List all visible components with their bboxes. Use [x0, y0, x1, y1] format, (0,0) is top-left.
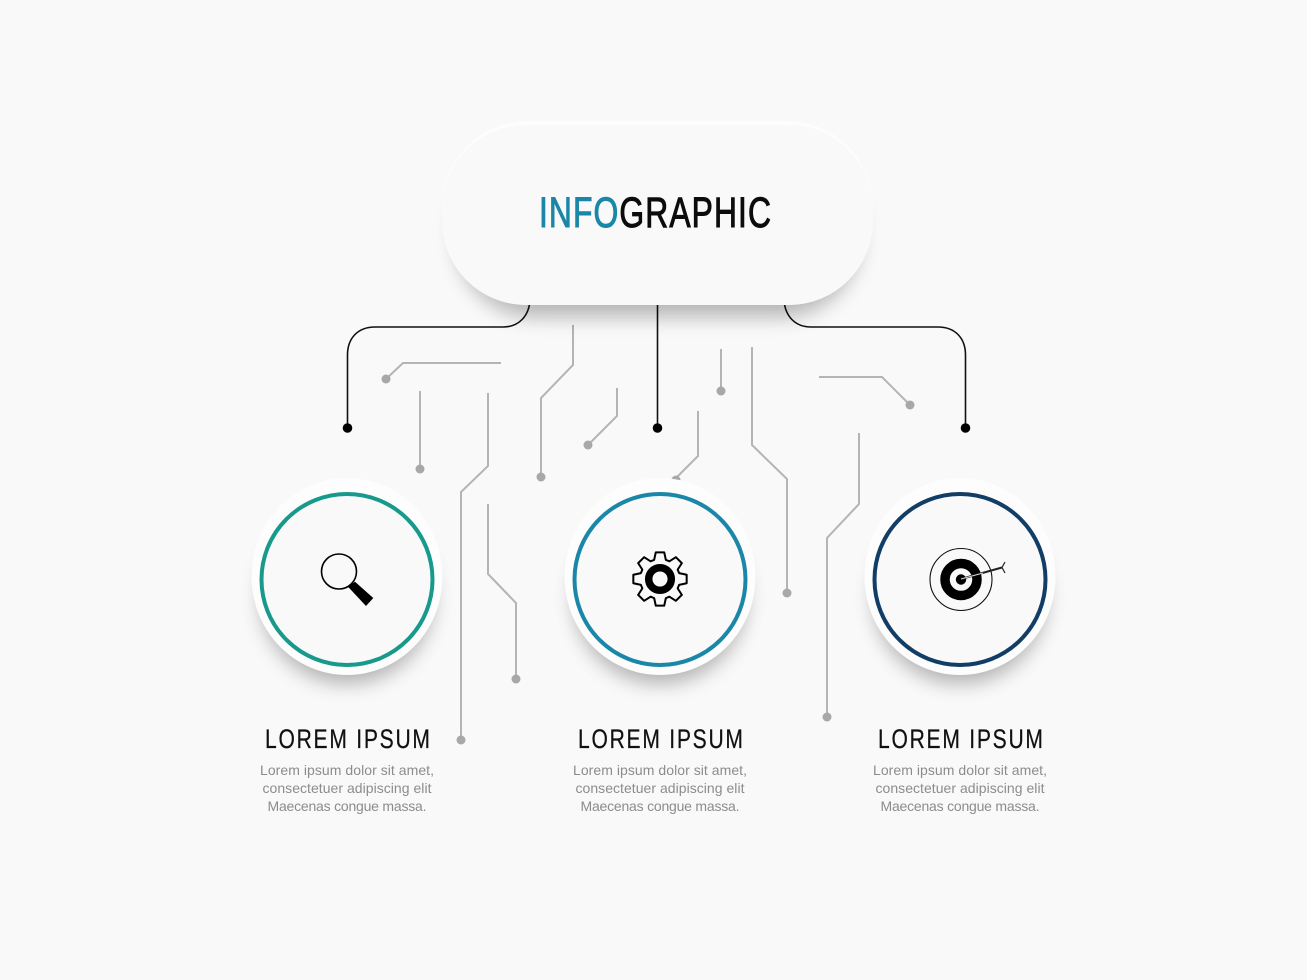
panel: target	[864, 478, 1056, 814]
text: search: Lorem ipsum dolor sit amet,	[260, 762, 434, 778]
text: target: Maecenas congue massa.	[880, 798, 1040, 814]
text: settings: consectetuer adipiscing elit	[576, 780, 745, 796]
panel: settings	[564, 478, 756, 814]
ring: settings	[574, 494, 746, 665]
heading: search: LOREM IPSUM	[265, 725, 430, 755]
ring: target	[874, 494, 1046, 665]
circuit lines: decorative grey traces	[382, 325, 914, 744]
text: search: consectetuer adipiscing elit	[262, 780, 432, 796]
text: settings: Maecenas congue massa.	[580, 798, 740, 814]
connector: centre branch	[653, 300, 662, 433]
connector: right branch	[784, 300, 970, 433]
icon: target with arrow	[930, 548, 1005, 610]
text: search: Maecenas congue massa.	[268, 798, 426, 814]
text: target: Lorem ipsum dolor sit amet,	[873, 762, 1047, 778]
text: target: consectetuer adipiscing elit	[876, 780, 1045, 796]
heading: settings: LOREM IPSUM	[578, 725, 743, 755]
disc: search	[252, 478, 442, 675]
ring: search	[262, 494, 432, 665]
connector: left branch	[343, 300, 530, 433]
panel: search	[252, 478, 442, 814]
icon: magnifying glass	[322, 554, 373, 606]
disc: target	[864, 478, 1056, 675]
heading: target: LOREM IPSUM	[878, 725, 1043, 755]
title pill	[442, 121, 873, 317]
title: INFOGRAPHIC	[539, 189, 771, 237]
icon: gear	[633, 552, 687, 606]
text: settings: Lorem ipsum dolor sit amet,	[573, 762, 747, 778]
disc: settings	[564, 478, 756, 675]
